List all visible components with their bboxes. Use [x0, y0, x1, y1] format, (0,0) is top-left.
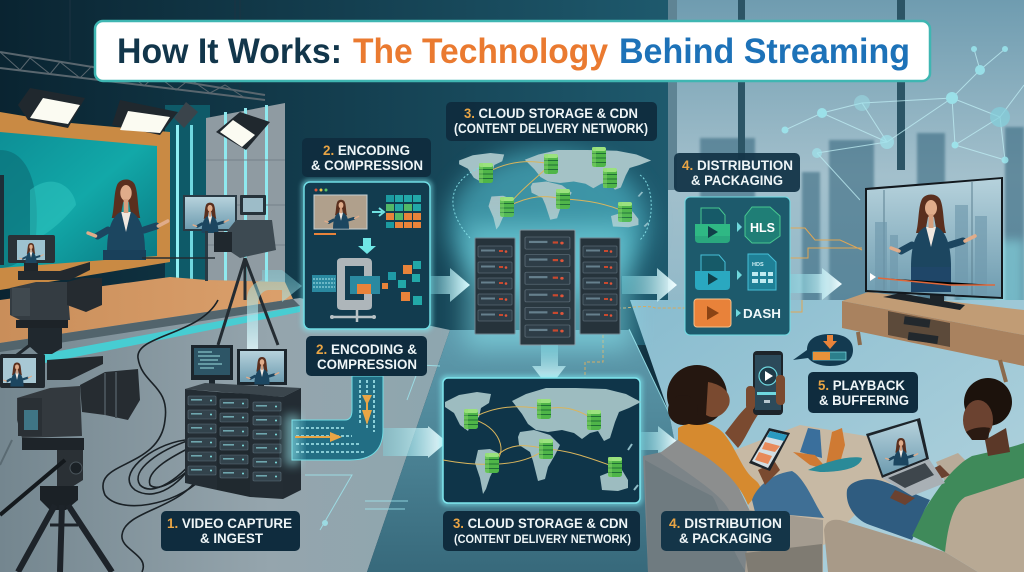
label: 4 distribution bottom — [661, 511, 790, 551]
studio: grey wall panel — [206, 103, 285, 292]
background: studio wall and centre — [0, 0, 700, 345]
compressed data — [312, 261, 422, 305]
label: 3 cloud storage top: (CONTENT DELIVERY NETWORK) — [454, 121, 648, 136]
studio: stage lights — [18, 88, 270, 150]
centre camera rig with monitors — [142, 195, 278, 345]
heading: How It Works: — [117, 32, 342, 71]
ingest server racks — [185, 383, 301, 499]
connector: CDN to distribution — [585, 306, 685, 385]
studio: wooden floor — [0, 277, 300, 372]
small arrow — [372, 208, 384, 216]
rug — [735, 425, 905, 545]
network overlay — [782, 46, 1024, 200]
studio: lighting truss — [0, 0, 265, 100]
man with laptop — [847, 378, 1024, 552]
presenter on set — [88, 180, 168, 252]
label: 3 cloud storage top — [446, 102, 657, 141]
processing channel arrow into encoding — [247, 270, 302, 362]
TV stand cabinet — [842, 292, 1024, 382]
arrow: servers to distribution — [622, 268, 677, 302]
heading: The Technology — [353, 32, 609, 71]
left armchair — [643, 438, 823, 572]
arrow: encoding to servers — [430, 268, 470, 302]
right armchair front — [824, 478, 1024, 572]
label: 2 encoding bottom — [306, 336, 427, 376]
label: 4 distribution top — [674, 153, 800, 192]
label: 2 encoding top — [302, 138, 431, 177]
phone — [746, 351, 785, 415]
label: 3 cloud storage top: 3. CLOUD STORAGE & CDN — [464, 106, 638, 121]
pixel block grid — [386, 195, 421, 228]
arrow: distribution to TV — [790, 268, 842, 300]
background: floor centre — [367, 330, 700, 572]
label: 4 distribution bottom: 4. DISTRIBUTION — [669, 516, 782, 531]
arrow: to bottom CDN map — [383, 426, 447, 458]
arrow: CDN map to viewers — [640, 426, 678, 456]
decorative circuit lines — [305, 329, 669, 530]
label: 4 distribution bottom: & PACKAGING — [679, 531, 772, 546]
label: 1 video capture: & INGEST — [200, 531, 264, 546]
connector lines to TV — [790, 228, 862, 312]
heading — [95, 21, 930, 81]
label: 2 encoding top: & COMPRESSION — [311, 158, 423, 173]
DASH row: DASH — [743, 307, 781, 321]
panel: bottom CDN map — [440, 375, 643, 506]
panel: encoding and compression — [301, 179, 433, 332]
studio: teal side wall — [165, 105, 210, 300]
label: 3 cloud storage bottom: 3. CLOUD STORAGE & CDN — [453, 516, 628, 531]
background: floor left — [0, 298, 450, 572]
central server racks — [465, 225, 630, 350]
tablet — [749, 428, 790, 471]
HLS folder row: HLS — [750, 221, 775, 235]
buffering icon — [793, 334, 853, 366]
progress line — [314, 233, 336, 235]
label: 3 cloud storage bottom — [443, 511, 640, 551]
panel: distribution and packaging — [685, 197, 790, 335]
label: 2 encoding bottom: COMPRESSION — [317, 357, 417, 372]
label: 5 playback: 5. PLAYBACK — [818, 378, 905, 393]
studio: orange frame and teal screen — [0, 112, 170, 290]
clamp — [330, 258, 376, 322]
label: 4 distribution top: & PACKAGING — [691, 173, 783, 188]
video thumbnail — [314, 195, 367, 229]
label: 3 cloud storage bottom: (CONTENT DELIVERY NETWORK) — [454, 532, 631, 546]
label: 5 playback: & BUFFERING — [819, 393, 909, 408]
label: 5 playback — [808, 372, 918, 413]
data stream band — [285, 376, 383, 465]
reclining person — [793, 428, 862, 472]
ingest monitors — [191, 345, 287, 393]
arrow: servers to CDN map — [532, 345, 566, 388]
HSS folder row: HDS — [752, 262, 764, 268]
TV with presenter — [865, 177, 1003, 310]
label: 2 encoding top: 2. ENCODING — [323, 143, 410, 158]
down arrow — [358, 238, 376, 254]
upper left camera — [0, 235, 102, 368]
background: floor right — [630, 300, 1024, 572]
window dots — [314, 188, 328, 192]
main foreground camera on tripod — [0, 354, 140, 572]
background: city window — [668, 0, 1024, 320]
label: 1 video capture — [161, 511, 300, 551]
laptop — [866, 418, 945, 496]
label: 1 video capture: 1. VIDEO CAPTURE — [167, 516, 292, 531]
woman with tablet and phone — [667, 365, 824, 518]
heading: Behind Streaming — [619, 32, 910, 71]
label: 4 distribution top: 4. DISTRIBUTION — [682, 158, 793, 173]
top world map with CDN nodes — [448, 147, 651, 300]
label: 2 encoding bottom: 2. ENCODING & — [316, 342, 417, 357]
right armchair back — [936, 453, 975, 482]
cables — [103, 300, 218, 572]
